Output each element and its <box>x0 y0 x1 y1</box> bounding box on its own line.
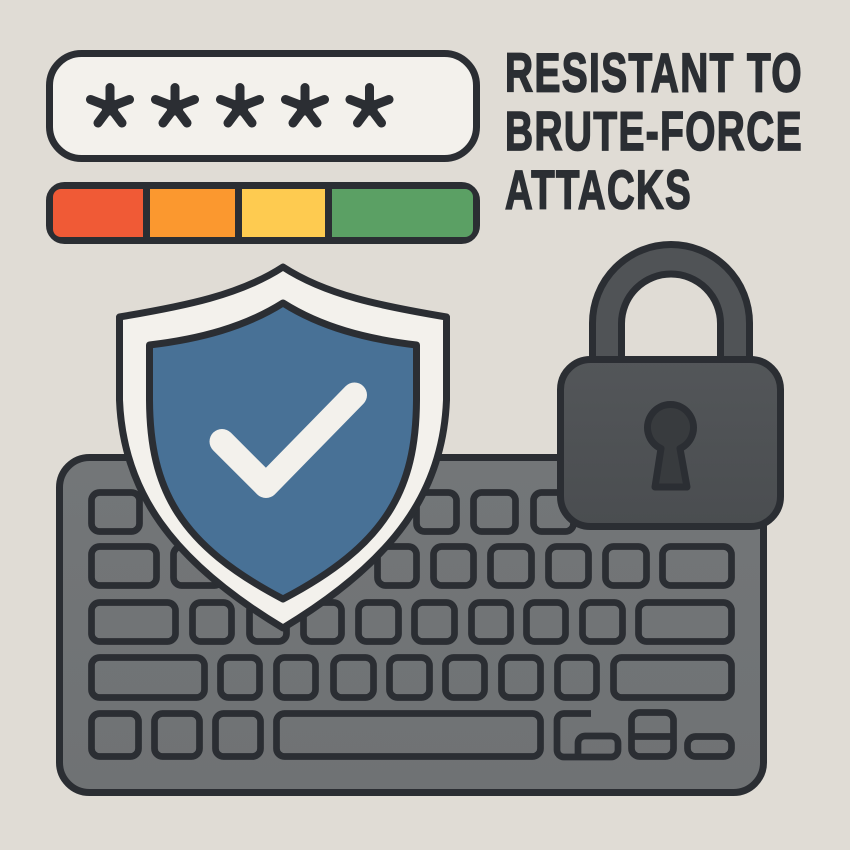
padlock shackle <box>592 245 750 360</box>
strength segment: yellow <box>242 189 325 237</box>
password field <box>50 54 476 158</box>
shield inner panel <box>150 303 416 599</box>
shield outer rim <box>120 267 446 628</box>
keyboard <box>60 458 764 792</box>
check mark <box>222 395 354 486</box>
keys <box>92 492 732 757</box>
title: ATTACKS <box>505 158 692 220</box>
password strength meter <box>50 186 476 240</box>
title <box>505 42 803 220</box>
padlock <box>560 245 780 527</box>
masked password asterisks <box>90 88 389 123</box>
keyhole <box>648 405 694 487</box>
shield with check mark <box>120 267 446 628</box>
strength segment: green <box>332 189 473 237</box>
strength segment: orange <box>150 189 235 237</box>
padlock body <box>560 360 780 526</box>
strength segment: red <box>53 189 143 237</box>
